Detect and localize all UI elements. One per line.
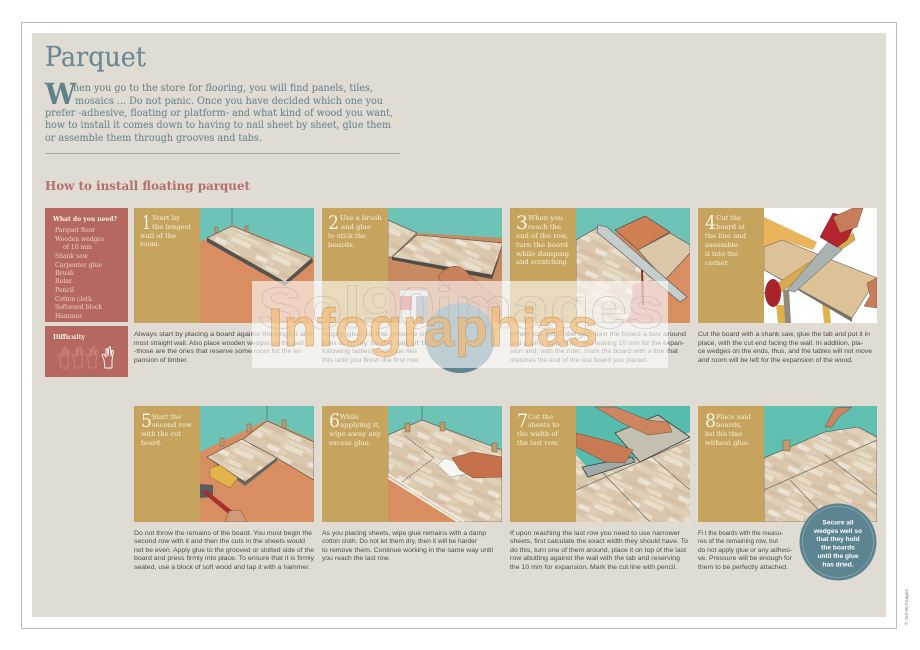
step 8 (698, 406, 877, 571)
step 3 label: and scratching. (516, 258, 569, 266)
step 5 text: not be even. Apply glue to the grooved or slotted side of the (134, 547, 314, 554)
step 8 text: them to be perfectly attached. (698, 564, 788, 571)
panel: difficulty: Difficulty (53, 333, 85, 341)
step 4 label: board at (716, 223, 745, 231)
step 6 label: 6 (329, 410, 340, 432)
step 4 label (698, 208, 764, 323)
illustration: second row with hammer (200, 406, 314, 522)
step 1 text: Always start by placing a board against the longest and (134, 331, 313, 338)
step 2 label: and glue (341, 223, 371, 231)
step 3 (510, 208, 690, 364)
step 6 label (322, 406, 388, 522)
step 3 label: When you (528, 214, 563, 222)
step 6 text: to remove them. Continue working in the same way until (322, 547, 493, 554)
step 2 label: 2 (328, 212, 339, 234)
step 5 label: with the cut (141, 430, 181, 438)
step 3 text: matches the end of the last board you placed. (510, 357, 648, 364)
step 5 text: second row with it and then the cuts in the sheets would (134, 538, 305, 545)
panel: what do you need: Shank saw (55, 253, 89, 260)
step 3 text (510, 331, 687, 364)
step 7 label: Cut the (528, 413, 553, 421)
intro text (44, 77, 393, 144)
step 8 label: 8 (705, 410, 716, 432)
step 6 label: excess glue. (329, 439, 371, 447)
step 4 label: Cut the (716, 214, 741, 222)
watermark: Sol90images (258, 276, 664, 341)
step 8 label: but this time (705, 430, 742, 438)
step 2 text (321, 331, 485, 364)
step 6 text: you reach the last row. (322, 555, 390, 562)
illustration: first board against the wall (200, 208, 314, 323)
step 7 text: the 10 mm for expansion. Mark the cut line with pencil. (510, 564, 677, 571)
watermark (252, 276, 668, 368)
step 6 (322, 406, 502, 562)
panel: what do you need: Softwood block (55, 304, 102, 311)
step 1 text: most straight wall. Also place wooden wedges on the wall (134, 340, 304, 347)
step 4 text: place, with the cut end facing the wall. In addition, pla- (698, 340, 863, 347)
panel: what do you need: Hammer (55, 313, 82, 320)
step 8 text: res of the remaining row, but (698, 538, 778, 545)
step 5 label: Start the (152, 413, 181, 421)
step 7 (510, 406, 690, 571)
step 6 label: wipe away any (329, 430, 381, 438)
step 4 (698, 208, 877, 364)
step 5 text (134, 530, 315, 571)
illustration: wiping excess glue (388, 406, 502, 522)
panel: what do you need: Parquet floor (55, 227, 95, 234)
step 8 label (698, 406, 764, 522)
callout: secure all wedges: the boards (821, 544, 855, 552)
step 2 text: this until you finish the first row. (322, 357, 420, 364)
section heading: How to install floating parquet (45, 179, 250, 193)
callout: secure all wedges: has dried. (822, 562, 854, 568)
callout: secure all wedges: Secure all (822, 520, 854, 526)
step 5 label: 5 (141, 410, 152, 432)
step 2 label (322, 208, 388, 323)
step 1 label: room. (140, 240, 160, 248)
step 1 label: the longest (152, 223, 191, 231)
step 7 text: sheets, first calculate the exact width they should have. To (510, 538, 688, 545)
intro text: mosaics ... Do not panic. Once you have decided which one you (75, 95, 383, 107)
step 8 text: Fi t the boards with the measu- (698, 530, 783, 537)
step 7 text (510, 530, 688, 571)
panel: what do you need: of 10 mm (63, 244, 92, 251)
step 8 label: without glue. (705, 439, 750, 447)
callout: secure all wedges (800, 504, 876, 580)
step 3 text: sion and, with the ruler, mark the board with a line that (510, 348, 678, 355)
step 1 text: -those are the ones that reserve some room for the ex- (134, 348, 303, 355)
step 4 label: 4 (705, 212, 716, 234)
step 7 label: the width of (517, 430, 559, 438)
step 8 text: do not apply glue or any adhesi- (698, 547, 792, 554)
panel: what do you need: Pencil (55, 287, 74, 294)
step 4 label: the line and (705, 232, 746, 240)
step 7 label (510, 406, 576, 522)
watermark: Infographias (268, 298, 598, 358)
step 2 text: Apply glue to the groove of the board and (322, 331, 485, 338)
step 2 (321, 208, 503, 364)
illustration: last row without glue (764, 406, 877, 522)
step 5 label: board. (141, 439, 162, 447)
step 7 text: If upon reaching the last row you need to use narrower (510, 530, 681, 537)
illustration: cutting the last row (576, 406, 690, 522)
intro text: or assemble them through grooves and tabs. (45, 132, 262, 144)
step 7 label: sheets to (528, 421, 559, 429)
callout: secure all wedges: until the glue (817, 553, 859, 560)
title: Parquet (45, 42, 146, 73)
panel: what do you need: What do you need? (52, 215, 117, 223)
panel: what do you need: Cotton cloth (55, 296, 92, 303)
panel: what do you need: Rolar (55, 278, 72, 285)
callout: secure all wedges: wedges well so (813, 528, 862, 535)
step 6 label: While (340, 413, 359, 421)
callout: secure all wedges: that they hold (816, 536, 860, 543)
image credit: © Sol 90 Images (903, 588, 909, 625)
illustration: gluing the boards (388, 208, 503, 323)
step 3 label: end of the row, (516, 232, 568, 240)
illustration: sawing the board (763, 208, 877, 323)
step 1 label: Start by (152, 214, 180, 222)
step 5 label (134, 406, 200, 522)
step 1 label: wall of the (140, 232, 176, 240)
step 1 label (134, 208, 200, 323)
step 3 label (510, 208, 576, 323)
step 3 label: reach the (528, 223, 561, 231)
step 1 text: pansion of timber. (134, 357, 188, 364)
step 1 label: 1 (142, 212, 151, 234)
panel: what do you need: Carpenter glue (55, 262, 102, 269)
panel: what do you need: Wooden wedges (55, 236, 104, 243)
icon: difficulty hands (58, 347, 114, 368)
step 7 text: do this, turn one of them around, place it on top of the last (510, 547, 686, 554)
step 4 text: and room will be left for the expansion of the wood. (698, 357, 853, 364)
panel: what do you need (45, 208, 128, 322)
step 5 text: board and press firmly into place. To ensure that it is firmly (134, 555, 315, 562)
intro text: how to install it comes down to having to nail sheet by sheet, glue them (45, 119, 391, 131)
step 7 text: row abutting against the wall with the tab and reserving (510, 555, 680, 562)
step 8 text (698, 530, 793, 571)
step 8 text: ve. Pressure will be enough for (698, 555, 793, 562)
step 2 label: to stick the (328, 232, 366, 240)
step 5 label: second row (152, 421, 193, 429)
callout: hidden circle behind watermark (425, 303, 495, 373)
step 2 text: following tables. Continue like (322, 348, 417, 355)
illustration: marking the end board (576, 208, 690, 323)
step 3 text: and push it against the wall leaving 10 mm for the expan- (510, 340, 684, 347)
panel: what do you need: Brush (55, 270, 74, 277)
step 2 text: join it firmly to the tab of the next one (321, 340, 473, 347)
step 1 text (134, 331, 313, 364)
step 6 text: As you placing sheets, wipe glue remains with a damp (322, 530, 486, 537)
step 2 label: Use a brush (340, 214, 382, 222)
step 8 label: Place said (716, 413, 751, 421)
step 3 label: while damping (516, 250, 569, 258)
step 4 label: assemble (705, 241, 738, 249)
step 5 text: Do not throw the remains of the board. You must begin the (134, 530, 312, 537)
step 1 (134, 208, 314, 364)
step 7 label: the last row. (517, 439, 559, 447)
step 8 label: boards, (716, 421, 742, 429)
step 5 text: seated, use a block of soft wood and tap it with a hammer. (134, 564, 310, 571)
step 4 text (698, 331, 872, 364)
step 4 text: ce wedges on the ends, thus, and the tables will not move (698, 348, 872, 355)
step 4 label: it into the (705, 250, 738, 258)
step 6 text (322, 530, 493, 562)
intro text: W (44, 77, 76, 111)
step 4 label: corner. (705, 259, 729, 267)
step 4 text: Cut the board with a shank saw, glue the tab and put it in (698, 331, 870, 338)
step 6 label: applying it, (340, 421, 380, 429)
step 6 text: cotton cloth. Do not let them dry, then it will be harder (322, 538, 478, 545)
step 7 label: 7 (517, 410, 528, 432)
panel: difficulty (45, 326, 128, 377)
step 3 text: When you get to the end, turn the board a bev around (510, 331, 687, 338)
intro text: hen you go to the store for flooring, you will find panels, tiles, (73, 82, 373, 94)
step 5 (134, 406, 315, 571)
intro text: prefer -adhesive, floating or platform- and what kind of wood you want, (45, 107, 393, 119)
step 3 label: turn the board (516, 241, 568, 249)
step 2 label: boards. (328, 241, 355, 249)
step 3 label: 3 (516, 212, 528, 234)
